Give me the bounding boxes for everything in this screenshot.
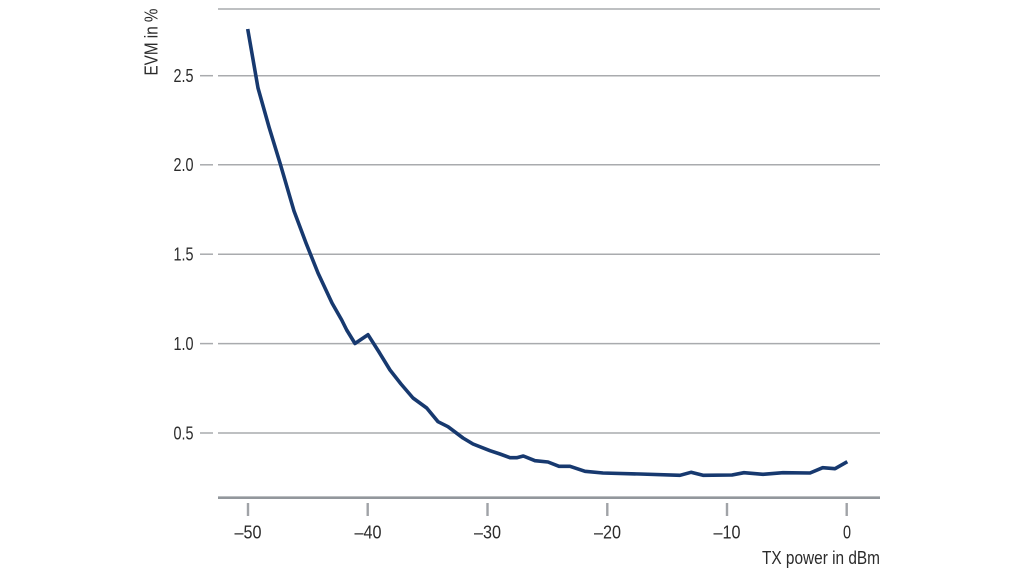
- y axis tick labels: [174, 66, 194, 444]
- y axis tick labels: 1.5: [174, 244, 194, 264]
- y axis tick labels: 2.5: [174, 66, 194, 86]
- x axis title: TX power in dBm: [762, 548, 880, 568]
- x axis tick labels: [234, 522, 851, 542]
- y axis tick labels: 0.5: [174, 424, 194, 444]
- y axis tick labels: 1.0: [174, 334, 194, 354]
- x axis tick labels: –30: [474, 522, 501, 542]
- data line: EVM curve: [248, 29, 847, 475]
- y axis tick labels: 2.0: [174, 155, 194, 175]
- x axis tick labels: –10: [714, 522, 740, 542]
- x axis tick labels: –50: [234, 522, 262, 542]
- x axis line: [218, 496, 880, 499]
- x axis tick labels: 0: [843, 522, 851, 542]
- x axis tick labels: –40: [354, 522, 382, 542]
- y-axis gridlines: [200, 9, 880, 433]
- x axis ticks: [248, 503, 847, 516]
- x axis tick labels: –20: [594, 522, 621, 542]
